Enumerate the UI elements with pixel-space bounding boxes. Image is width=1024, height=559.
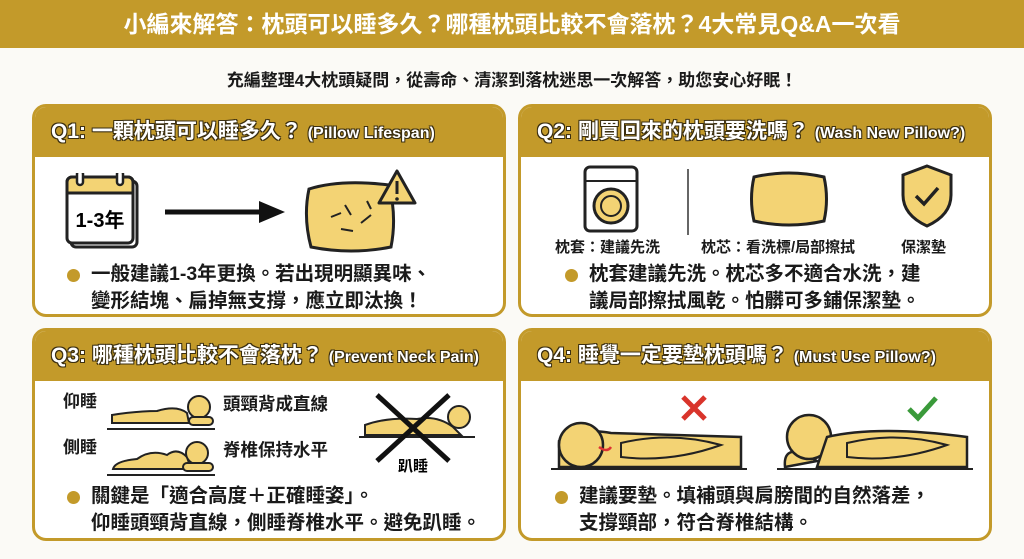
- panel: Q3: 頭頸背成直線: [223, 394, 328, 414]
- panel: Q2: 枕芯：看洗標/局部擦拭: [701, 239, 855, 256]
- text labels: 仰睡: [63, 392, 97, 411]
- heading Q2: Q2: 剛買回來的枕頭要洗嗎？ (Wash New Pillow?): [537, 120, 965, 143]
- text block Q1: 一般建議1-3年更換。若出現明顯異味、: [91, 263, 431, 285]
- icon: shield: [902, 164, 952, 228]
- text block Q3: [67, 485, 481, 534]
- divider: [687, 169, 689, 235]
- subtitle: 充編整理4大枕頭疑問，從壽命、清潔到落枕迷思一次解答，助您安心好眠！: [227, 71, 797, 90]
- heading Q1: [35, 107, 503, 157]
- text block Q4: [555, 485, 930, 534]
- labels: 枕套：建議先洗: [555, 239, 660, 256]
- icon: worn pillow with warning: [304, 169, 417, 252]
- icon: no pillow (wrong): [551, 395, 747, 470]
- text block Q3: 關鍵是「適合高度＋正確睡姿」。: [91, 485, 374, 507]
- icon: prone sleeper crossed: 趴睡: [398, 458, 428, 475]
- text block Q3: 仰睡頭頸背直線，側睡脊椎水平。避免趴睡。: [91, 512, 481, 534]
- title: [0, 0, 1024, 48]
- text block Q2: [565, 263, 921, 312]
- text block Q2: 枕套建議先洗。枕芯多不適合水洗，建: [589, 263, 921, 285]
- arrow: [165, 201, 285, 223]
- icon: supine sleeper: [107, 395, 215, 430]
- icon: calendar: 1-3年: [76, 209, 124, 232]
- panel: Q3: [32, 328, 506, 541]
- panel: Q2: [518, 104, 992, 317]
- icon: pillow: [750, 172, 828, 226]
- icon: prone sleeper crossed: [359, 393, 475, 475]
- title: 小編來解答：枕頭可以睡多久？哪種枕頭比較不會落枕？4大常見Q&A一次看: [124, 11, 900, 37]
- heading Q3: [35, 331, 503, 381]
- heading Q2: [521, 107, 989, 157]
- panel: Q3: 脊椎保持水平: [223, 440, 328, 460]
- text block Q4: 支撐頸部，符合脊椎結構。: [579, 512, 813, 534]
- icon: with pillow (correct): [777, 396, 973, 470]
- icon: side sleeper: [107, 441, 215, 476]
- text block Q1: [67, 263, 431, 312]
- panel: Q2: 保潔墊: [901, 239, 946, 256]
- heading Q3: Q3: 哪種枕頭比較不會落枕？ (Prevent Neck Pain): [51, 344, 479, 367]
- panel: Q1: [32, 104, 506, 317]
- heading Q4: [521, 331, 989, 381]
- text block Q2: 議局部擦拭風乾。怕髒可多鋪保潔墊。: [589, 290, 921, 312]
- panel: Q4: [518, 328, 992, 541]
- icon: washing machine: [584, 166, 638, 232]
- panel: Q3: 側睡: [63, 438, 97, 457]
- text block Q1: 變形結塊、扁掉無支撐，應立即汰換！: [91, 290, 423, 312]
- icon: calendar: [66, 173, 138, 248]
- text block Q4: 建議要墊。填補頭與肩膀間的自然落差，: [579, 485, 930, 507]
- heading Q1: Q1: 一顆枕頭可以睡多久？ (Pillow Lifespan): [51, 120, 435, 143]
- heading Q4: Q4: 睡覺一定要墊枕頭嗎？ (Must Use Pillow?): [537, 344, 936, 367]
